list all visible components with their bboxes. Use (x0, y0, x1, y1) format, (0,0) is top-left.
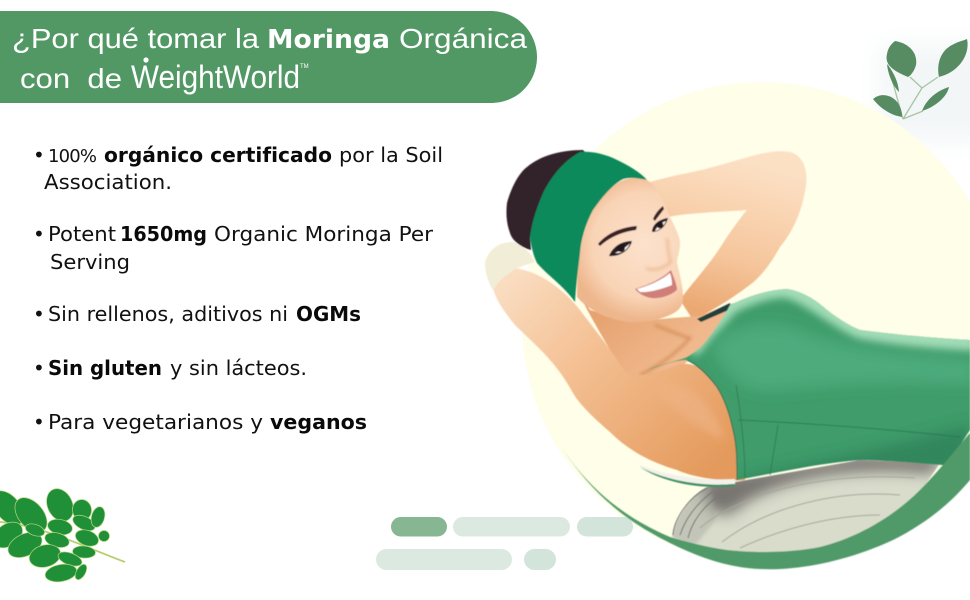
left brow (598, 226, 637, 246)
bullet 1: • (33, 143, 45, 167)
top seam and folds (736, 385, 960, 478)
green edge of strap (640, 467, 735, 487)
WeightWorld logo: WeightWorld (131, 59, 300, 95)
bullet 4: y sin lácteos. (170, 356, 307, 380)
header banner (0, 11, 537, 103)
bullet 2: Potent (48, 222, 116, 246)
lower fabric shade (746, 426, 969, 478)
hair (506, 150, 588, 250)
bullet 5: • (33, 410, 45, 434)
bullet list (33, 143, 443, 434)
bullet 5: veganos (270, 410, 367, 434)
photo: woman on exercise ball (485, 150, 970, 569)
icon: moringa sprig bottom left (0, 484, 125, 584)
bullet 1: 100% (48, 146, 97, 167)
bullet 1: orgánico certificado (104, 143, 332, 167)
exercise ball (672, 455, 945, 553)
bullet 3: Sin rellenos, aditivos ni (48, 302, 288, 326)
bullet 3: OGMs (296, 302, 361, 326)
neck and chest (580, 296, 733, 385)
nose shading (646, 238, 671, 270)
bullet 2: 1650mg (120, 222, 207, 246)
right brow (653, 206, 664, 221)
white waist strap (640, 465, 735, 485)
underarm shading (650, 382, 725, 440)
heading line 1: ¿Por qué tomar la (12, 23, 259, 54)
mouth (635, 270, 677, 298)
dark edge of top along arm (687, 360, 737, 480)
bullet 2: Serving (50, 250, 130, 274)
bullet 4: Sin gluten (48, 356, 162, 380)
heading line 1: Orgánica (399, 23, 527, 54)
icon: eucalyptus sprig top right (873, 39, 968, 119)
left eye (609, 241, 632, 256)
green crescent band (562, 433, 970, 569)
bullet 1 (33, 143, 443, 194)
soft backdrop behind top-right leaves (880, 45, 970, 140)
right eye (652, 218, 668, 232)
bullet 1: Association. (44, 170, 172, 194)
bullet 2: • (33, 222, 45, 246)
bullet 4: • (33, 356, 45, 380)
bra strap (697, 303, 731, 322)
bust highlight (712, 324, 970, 391)
face (577, 178, 683, 322)
WeightWorld logo: TM (300, 64, 309, 70)
hand wrap (485, 242, 535, 290)
bullet 3: • (33, 302, 45, 326)
cream circle background (522, 82, 970, 562)
bullet 2 (33, 222, 434, 274)
bullet 2: Organic Moringa Per (214, 222, 434, 246)
bullet 1: por la Soil (339, 143, 443, 167)
back arm (650, 151, 806, 320)
top light edge (690, 289, 970, 350)
collarbone shading (640, 325, 690, 375)
heading line 2: con de (20, 63, 122, 94)
green top (648, 288, 970, 480)
heading line 1: Moringa (267, 25, 390, 55)
foreground arm (492, 266, 745, 481)
headband (530, 152, 647, 302)
pill decorations (376, 517, 633, 570)
bullet 5: Para vegetarianos y (48, 410, 263, 434)
